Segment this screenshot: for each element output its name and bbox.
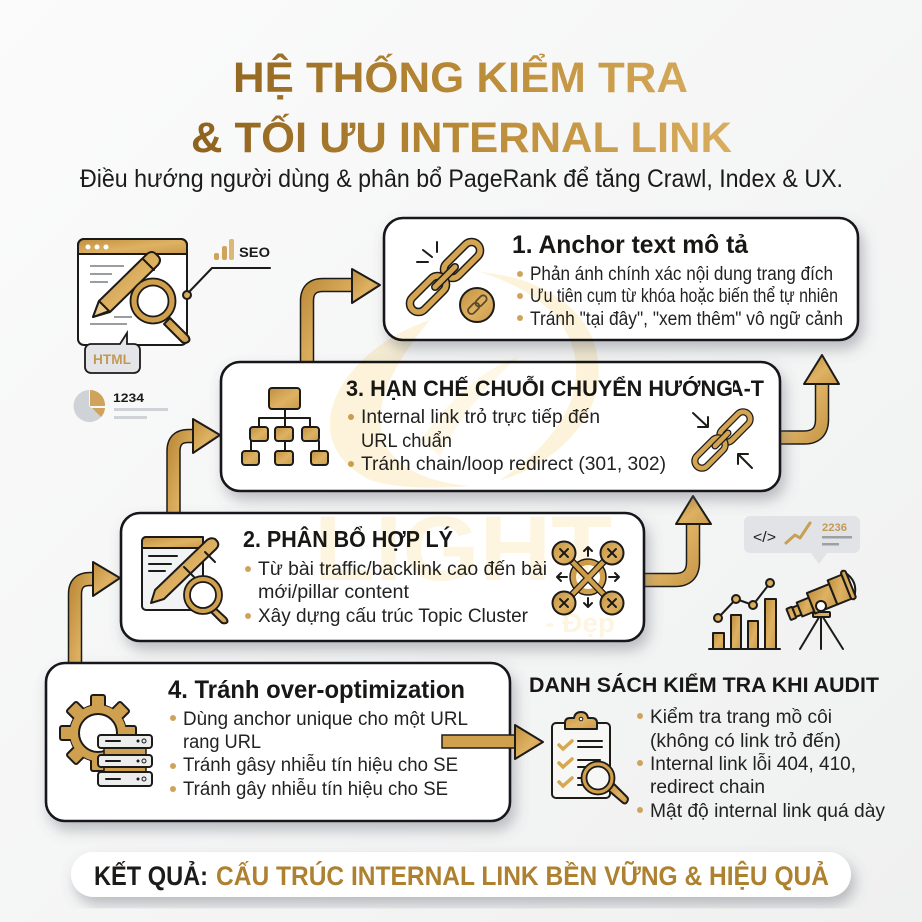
icon: clipboard checklist with magnifier xyxy=(552,712,628,804)
list: redirect bullets: Tránh chain/loop redirect (301, 302) xyxy=(361,454,666,475)
title xyxy=(191,53,732,162)
icon: SEO signal label: SEO xyxy=(239,244,270,260)
icon: chain link with coin xyxy=(406,238,494,322)
icon: SEO signal label xyxy=(214,239,270,260)
icon: pie chart with 1234 xyxy=(74,390,168,422)
subtitle: Điều hướng người dùng & phân bổ PageRank để tăng Crawl, Index & UX. xyxy=(80,165,843,193)
icon: cluster network xyxy=(552,542,624,614)
heading: audit checklist: DANH SÁCH KIỂM TRA KHI AUDIT xyxy=(529,674,879,697)
icon: HTML speech bubble: HTML xyxy=(93,352,131,367)
list: audit bullets: Mật độ internal link quá dày xyxy=(650,801,885,822)
result banner: KẾT QUẢ: xyxy=(94,859,208,891)
panel: 4. avoid over-optimization xyxy=(46,663,510,821)
icon: bar and line chart xyxy=(709,579,780,649)
list: redirect bullets xyxy=(348,407,666,475)
watermark: LIGHT logo: - Đẹp xyxy=(545,608,615,638)
arrow: card 2 to the right and up xyxy=(642,496,711,580)
list: anchor text bullets: Tránh "tại đây", "xem thêm" vô ngữ cảnh xyxy=(530,309,843,330)
list: anchor text bullets: Ưu tiên cụm từ khóa hoặc biến thể tự nhiên xyxy=(530,286,838,307)
list: audit bullets: redirect chain xyxy=(650,777,765,798)
heading: balanced distribution: 2. PHÂN BỔ HỢP LÝ xyxy=(243,525,453,552)
list: distribution bullets: mới/pillar content xyxy=(258,582,410,603)
list: distribution bullets xyxy=(245,559,547,627)
icon: telescope xyxy=(781,569,860,649)
list: over-optimization bullets: Tránh gâsy nhiễu tín hiệu cho SE xyxy=(183,754,458,776)
arrow: card 3 to the upper right xyxy=(778,355,839,438)
panel: 3. redirect chains xyxy=(221,362,780,491)
heading: redirect chains: 3. HẠN CHẾ CHUỖI CHUYỂN HƯỚNG xyxy=(346,375,733,401)
icon: gear and server xyxy=(60,695,152,786)
icon: HTML speech bubble xyxy=(85,333,140,373)
list: audit bullets: Internal link lỗi 404, 410, xyxy=(650,753,856,775)
list: redirect bullets: URL chuẩn xyxy=(361,431,452,452)
result banner xyxy=(71,852,851,897)
list: anchor text bullets xyxy=(517,264,843,330)
list: distribution bullets: Xây dựng cấu trúc Topic Cluster xyxy=(258,606,529,627)
list: redirect bullets: Internal link trỏ trực tiếp đến xyxy=(361,407,600,428)
icon: site hierarchy xyxy=(242,388,328,465)
icon: SEO browser with pencil and magnifier xyxy=(78,239,270,345)
list: audit bullets: (không có link trỏ đến) xyxy=(650,731,841,752)
list: over-optimization bullets: Dùng anchor unique cho một URL xyxy=(183,709,468,730)
list: audit bullets xyxy=(637,707,885,822)
icon: pie chart with 1234: 1234 xyxy=(113,391,144,405)
panel: 2. balanced distribution xyxy=(121,513,644,641)
list: over-optimization bullets: rang URL xyxy=(183,732,261,753)
callout: code and trend bubble xyxy=(744,516,860,564)
arrow: card 4 to card 2 xyxy=(75,562,120,665)
watermark: LIGHT logo xyxy=(314,272,615,638)
heading: anchor text: 1. Anchor text mô tả xyxy=(512,231,749,259)
arrow: card 4 to audit checklist xyxy=(442,725,543,759)
icon: chain with arrows xyxy=(692,409,753,471)
heading: over-optimization: 4. Tránh over-optimization xyxy=(168,676,465,704)
callout: code and trend bubble: 2236 xyxy=(822,522,847,534)
icon: window with pencil and magnifier xyxy=(142,537,228,623)
heading: redirect chains: A-T xyxy=(728,376,765,401)
title: & TỐI ƯU INTERNAL LINK xyxy=(191,113,732,162)
callout: code and trend bubble: </> xyxy=(753,529,776,546)
panel: 1. Anchor text xyxy=(384,218,858,340)
arrow: card 3 to card 1 xyxy=(307,269,380,364)
arrow: card 2 to card 3 xyxy=(174,419,220,515)
result banner: CẤU TRÚC INTERNAL LINK BỀN VỮNG & HIỆU QUẢ xyxy=(216,859,829,891)
list: audit bullets: Kiểm tra trang mồ côi xyxy=(650,707,832,728)
title: HỆ THỐNG KIỂM TRA xyxy=(233,53,688,102)
list: anchor text bullets: Phản ánh chính xác nội dung trang đích xyxy=(530,264,833,285)
watermark: LIGHT logo: LIGHT xyxy=(314,498,612,600)
list: over-optimization bullets xyxy=(170,709,468,800)
list: distribution bullets: Từ bài traffic/backlink cao đến bài xyxy=(258,559,547,580)
list: over-optimization bullets: Tránh gây nhiễu tín hiệu cho SE xyxy=(183,778,448,800)
